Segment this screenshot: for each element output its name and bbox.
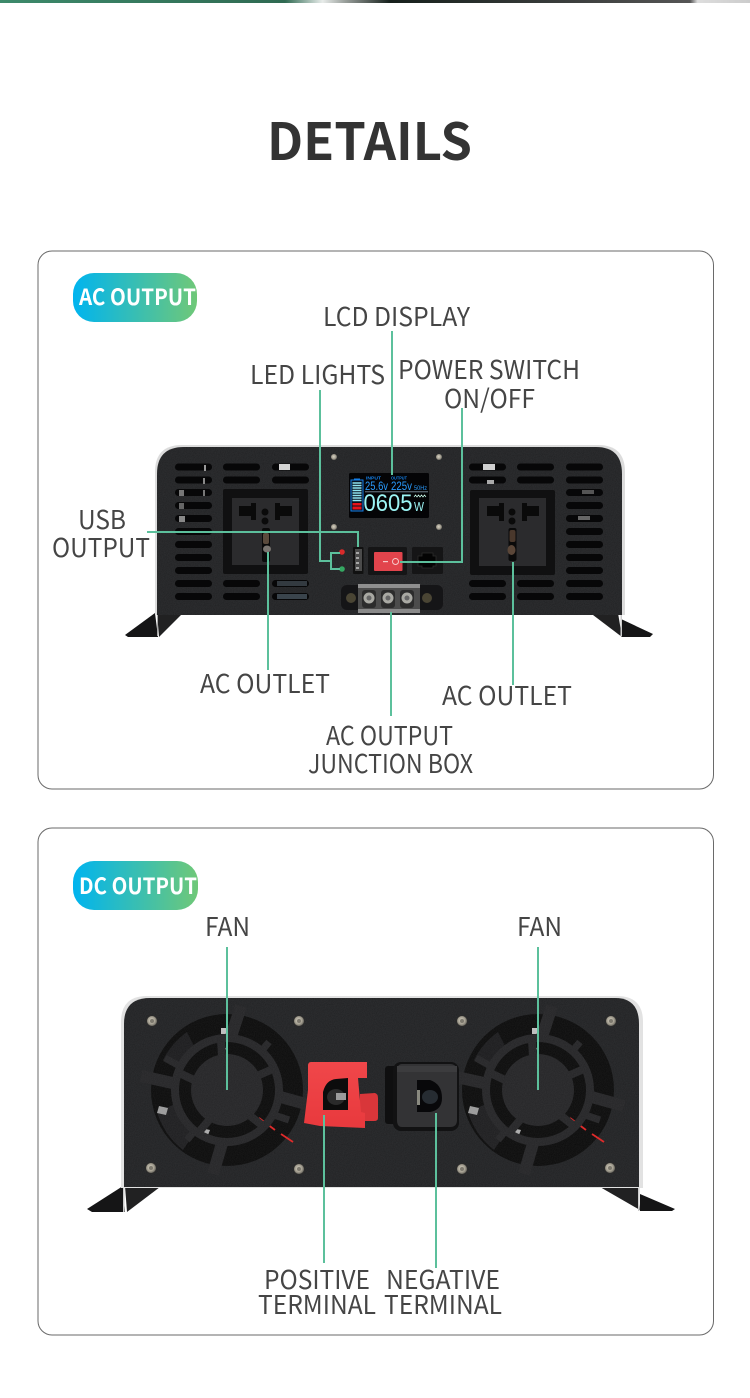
top image band bbox=[0, 0, 750, 3]
label: USB output bbox=[52, 500, 150, 565]
LCD display bbox=[349, 473, 429, 518]
positive terminal bbox=[304, 1062, 378, 1128]
label: power switch: ON/OFF bbox=[444, 379, 535, 416]
battery gauge bbox=[351, 478, 363, 511]
right vents bbox=[469, 464, 603, 600]
label: negative terminal: NEGATIVE bbox=[386, 1260, 500, 1297]
chassis grain bbox=[124, 998, 639, 1187]
LCD display: 225v bbox=[391, 479, 412, 493]
label: positive terminal bbox=[258, 1260, 376, 1322]
mounting feet bbox=[87, 1186, 675, 1212]
LCD display: W bbox=[414, 499, 425, 514]
USB port bbox=[353, 547, 364, 574]
title: DETAILS bbox=[267, 101, 472, 175]
inverter front view bbox=[125, 445, 653, 637]
label: AC output junction box bbox=[308, 716, 473, 781]
label: positive terminal: POSITIVE bbox=[264, 1260, 370, 1297]
LCD display: 25.6v bbox=[365, 479, 388, 493]
badge: DC output bbox=[73, 861, 198, 910]
label: right fan: FAN bbox=[517, 907, 562, 944]
chassis screws bbox=[145, 1015, 617, 1175]
label: AC output junction box: AC OUTPUT bbox=[326, 716, 453, 753]
panel: AC output bbox=[38, 251, 714, 789]
power switch bbox=[368, 547, 407, 575]
label: left AC outlet: AC OUTLET bbox=[200, 664, 330, 701]
right fan bbox=[452, 1006, 624, 1174]
AC terminal block bbox=[341, 584, 443, 613]
label: USB output: USB bbox=[78, 500, 126, 537]
LED lights bbox=[339, 549, 345, 572]
callout lines: DC bbox=[227, 947, 538, 1268]
label: right AC outlet: AC OUTLET bbox=[442, 676, 572, 713]
mounting feet bbox=[125, 612, 653, 637]
label: negative terminal bbox=[384, 1260, 502, 1322]
left vents bbox=[175, 464, 309, 600]
RJ port bbox=[412, 547, 443, 574]
badge: AC output: AC OUTPUT bbox=[78, 280, 196, 312]
LCD display: INPUT bbox=[366, 476, 381, 480]
label: LED lights: LED LIGHTS bbox=[250, 355, 385, 392]
LCD display: OUTPUT bbox=[391, 476, 407, 480]
right AC socket bbox=[470, 490, 555, 575]
label: positive terminal: TERMINAL bbox=[258, 1285, 376, 1322]
inverter rear view bbox=[87, 996, 675, 1212]
left AC socket bbox=[223, 489, 308, 574]
LCD display: 0605 bbox=[364, 490, 412, 517]
panel: DC output bbox=[38, 828, 714, 1335]
chassis bbox=[121, 996, 643, 1188]
label: AC output junction box: JUNCTION BOX bbox=[308, 744, 473, 781]
LCD display: 50Hz bbox=[414, 486, 427, 492]
label: negative terminal: TERMINAL bbox=[384, 1285, 502, 1322]
badge: AC output bbox=[73, 273, 197, 322]
callout lines: AC bbox=[147, 331, 513, 716]
panel screws bbox=[331, 454, 442, 530]
label: LCD display: LCD DISPLAY bbox=[323, 297, 470, 334]
label: left fan: FAN bbox=[205, 907, 250, 944]
badge: DC output: DC OUTPUT bbox=[79, 869, 197, 901]
chassis bbox=[155, 445, 625, 615]
left fan bbox=[141, 1006, 313, 1174]
label: USB output: OUTPUT bbox=[52, 528, 150, 565]
label: power switch bbox=[398, 350, 580, 416]
label: power switch: POWER SWITCH bbox=[398, 350, 580, 387]
negative terminal bbox=[385, 1062, 459, 1131]
